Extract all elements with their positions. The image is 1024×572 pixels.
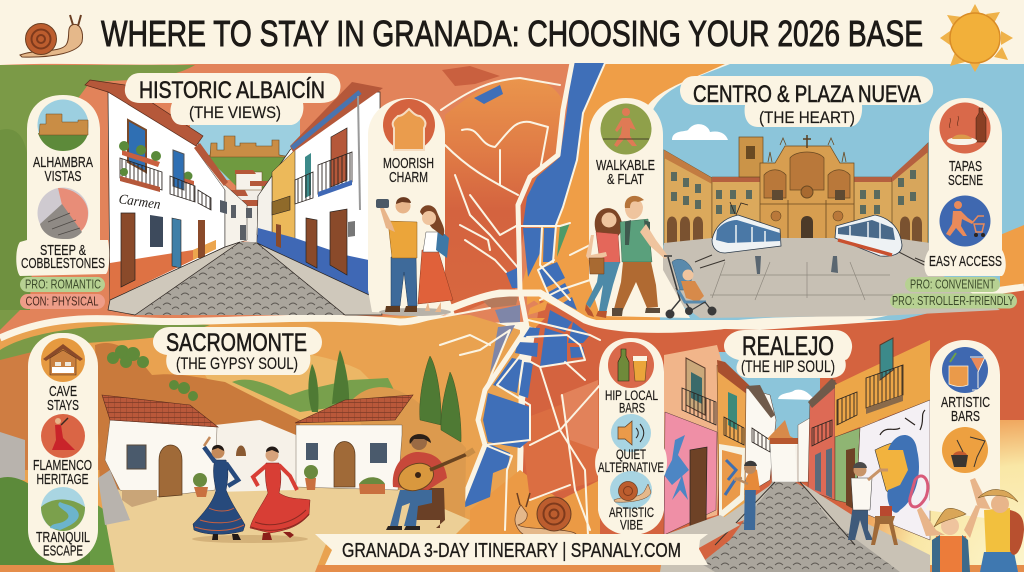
illustration: family with stroller [585, 196, 716, 318]
label: Alhambra vistas: VISTAS [44, 169, 82, 185]
heading: Sacromonte [153, 327, 322, 375]
windows on plaza buildings [671, 170, 916, 214]
icon: tranquil escape [41, 487, 85, 531]
callout: Walkable and flat pill [589, 98, 690, 318]
panel: central street map [425, 63, 605, 535]
label: artistic bars: ARTISTIC [941, 395, 990, 411]
label: flamenco heritage: HERITAGE [36, 472, 89, 488]
icon: flamenco heritage [41, 414, 85, 458]
icon: map snail [515, 493, 580, 539]
icon: steep cobblestones [38, 188, 88, 239]
label: tranquil escape: TRANQUIL [36, 530, 90, 546]
label: quiet alternative: ALTERNATIVE [598, 460, 664, 475]
heading: Realejo: (THE HIP SOUL) [741, 357, 835, 376]
icon: cave stays [41, 338, 85, 382]
cloud [672, 124, 728, 140]
icon: easy access [940, 196, 990, 246]
label: steep and cobblestones: COBBLESTONES [21, 256, 105, 272]
icon: snail artistic vibe [610, 471, 652, 509]
label: cave stays: STAYS [47, 398, 79, 414]
label: hip local bars: HIP LOCAL [605, 388, 658, 403]
label: steep and cobblestones: STEEP & [40, 243, 86, 259]
balcony plants [119, 141, 326, 185]
tag: pro romantic: PRO: ROMANTIC [25, 278, 101, 292]
label: tranquil escape: ESCAPE [43, 544, 83, 560]
icon: food and drink [942, 427, 988, 473]
map: roads [425, 63, 605, 535]
icon: speaker quiet [611, 414, 651, 452]
label: tapas scene: SCENE [948, 173, 983, 189]
heading: Historic Albaicin [125, 73, 340, 125]
heading: Centro and Plaza Nueva [680, 76, 933, 127]
tag: pro convenient: PRO: CONVENIENT [910, 278, 995, 292]
panel: Historic Albaicin [16, 73, 455, 316]
heading: Historic Albaicin: HISTORIC ALBAICÍN [139, 77, 325, 104]
illustration: tourist couple taking a photo [376, 197, 453, 316]
banner: itinerary footer [315, 534, 708, 565]
scene: Realejo street art lane [660, 338, 930, 572]
label: Alhambra vistas: ALHAMBRA [33, 155, 93, 171]
icon: cocktails [942, 347, 988, 393]
heading: Historic Albaicin: (THE VIEWS) [189, 103, 281, 122]
callout: Realejo left pill [595, 338, 667, 535]
icon: walking person [600, 104, 652, 154]
label: artistic vibe: ARTISTIC [609, 505, 654, 520]
illustration: flamenco dancers [192, 437, 310, 543]
callout: right pill tapas and access [924, 98, 1006, 276]
label: hip local bars: BARS [619, 400, 645, 416]
scene: cave houses and flamenco [95, 343, 470, 572]
heading: Sacromonte: (THE GYPSY SOUL) [176, 354, 298, 373]
illustration: mural painter [848, 462, 898, 545]
panel: Sacromonte [28, 327, 474, 572]
label: walkable and flat: WALKABLE [596, 158, 655, 174]
illustration: guitarist [386, 434, 474, 530]
heading: Centro and Plaza Nueva: (THE HEART) [759, 108, 855, 127]
icon: tapas and wine [940, 102, 990, 154]
label: artistic bars: BARS [951, 409, 980, 425]
callout: Albaicin left pill [16, 95, 109, 276]
panel: Centro and Plaza Nueva [585, 76, 1017, 318]
icon: Moorish arch [383, 99, 435, 151]
panel band: white wave separating top scenes [0, 287, 1024, 338]
scene: Albaicin street [85, 80, 383, 315]
label: walkable and flat: & FLAT [607, 172, 644, 188]
label: Carmen shop sign: Carmen [118, 192, 161, 213]
icon: beer and bottle [608, 342, 654, 388]
callout: Realejo right pill [925, 340, 1000, 520]
label: quiet alternative: QUIET [616, 447, 646, 462]
snail logo [20, 15, 83, 57]
scene: Plaza Nueva [660, 124, 1000, 318]
icon: Alhambra vistas [38, 100, 88, 151]
callout: Sacromonte left pill [28, 333, 98, 563]
banner: itinerary footer: GRANADA 3-DAY ITINERARY | SPANALY.COM [342, 540, 681, 562]
icon: right tram [835, 215, 902, 256]
heading: Sacromonte: SACROMONTE [166, 329, 307, 357]
callout: Moorish charm pill [368, 98, 455, 315]
illustration: cheering tourists [917, 478, 1024, 572]
map: river Darro and city blocks [463, 63, 605, 508]
label: Moorish charm: CHARM [389, 170, 428, 186]
heading: Realejo: REALEJO [742, 331, 834, 361]
illustration: artist painting left wall [734, 461, 760, 530]
label: tapas scene: TAPAS [949, 159, 982, 175]
heading: Realejo [724, 330, 852, 378]
hillside bushes [107, 345, 198, 401]
icon: sun [940, 4, 1013, 72]
label: cave stays: CAVE [49, 384, 77, 400]
label: Moorish charm: MOORISH [383, 156, 434, 172]
label: artistic vibe: VIBE [620, 518, 643, 532]
mural [875, 410, 928, 513]
label: flamenco heritage: FLAMENCO [33, 458, 92, 474]
heading: Centro and Plaza Nueva: CENTRO & PLAZA NUEVA [693, 81, 921, 108]
arcades [667, 216, 922, 243]
panel: Realejo [595, 330, 1024, 572]
tag: con physical: CON: PHYSICAL [26, 294, 99, 308]
icon: left tram [712, 202, 781, 253]
